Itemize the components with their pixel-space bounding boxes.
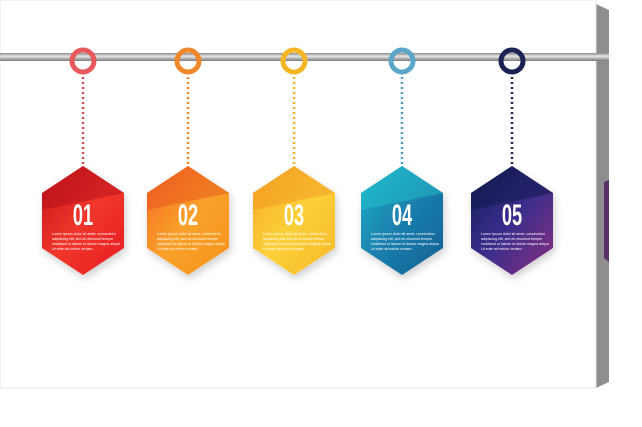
item 1: Lorem ipsum dolor sit amet, consectetur (52, 232, 117, 236)
side edge hexagon wrap (604, 180, 609, 262)
item 5: Lorem ipsum dolor sit amet, consectetur (481, 232, 546, 236)
item 5 (471, 50, 553, 275)
item 2: incididunt ut labore et dolore magna aliqua (157, 242, 225, 246)
item 4: 04 (392, 200, 412, 232)
item 4: Ut enim ad minim veniam. (371, 247, 413, 251)
item 2: Ut enim ad minim veniam. (157, 247, 199, 251)
item 3: incididunt ut labore et dolore magna aliqua (263, 242, 331, 246)
item 5: adipiscing elit, sed do eiusmod tempor (481, 237, 543, 241)
item 3: Ut enim ad minim veniam. (263, 247, 305, 251)
item 1: 01 (73, 200, 93, 232)
item 4 (361, 50, 443, 275)
item 3 (253, 50, 335, 275)
item 1: adipiscing elit, sed do eiusmod tempor (52, 237, 114, 241)
rod (0, 53, 609, 61)
item 4: incididunt ut labore et dolore magna aliqua (371, 242, 439, 246)
item 5: 05 (502, 200, 522, 232)
item 4: Lorem ipsum dolor sit amet, consectetur (371, 232, 436, 236)
item 2: adipiscing elit, sed do eiusmod tempor (157, 237, 219, 241)
item 1 (42, 50, 124, 275)
item 4: adipiscing elit, sed do eiusmod tempor (371, 237, 433, 241)
item 3: Lorem ipsum dolor sit amet, consectetur (263, 232, 328, 236)
item 1: incididunt ut labore et dolore magna aliqua (52, 242, 120, 246)
item 5: incididunt ut labore et dolore magna aliqua (481, 242, 549, 246)
item 2: 02 (178, 200, 198, 232)
item 5: Ut enim ad minim veniam. (481, 247, 523, 251)
item 1: Ut enim ad minim veniam. (52, 247, 94, 251)
item 3: adipiscing elit, sed do eiusmod tempor (263, 237, 325, 241)
item 2: Lorem ipsum dolor sit amet, consectetur (157, 232, 222, 236)
item 3: 03 (284, 200, 304, 232)
item 2 (147, 50, 229, 275)
